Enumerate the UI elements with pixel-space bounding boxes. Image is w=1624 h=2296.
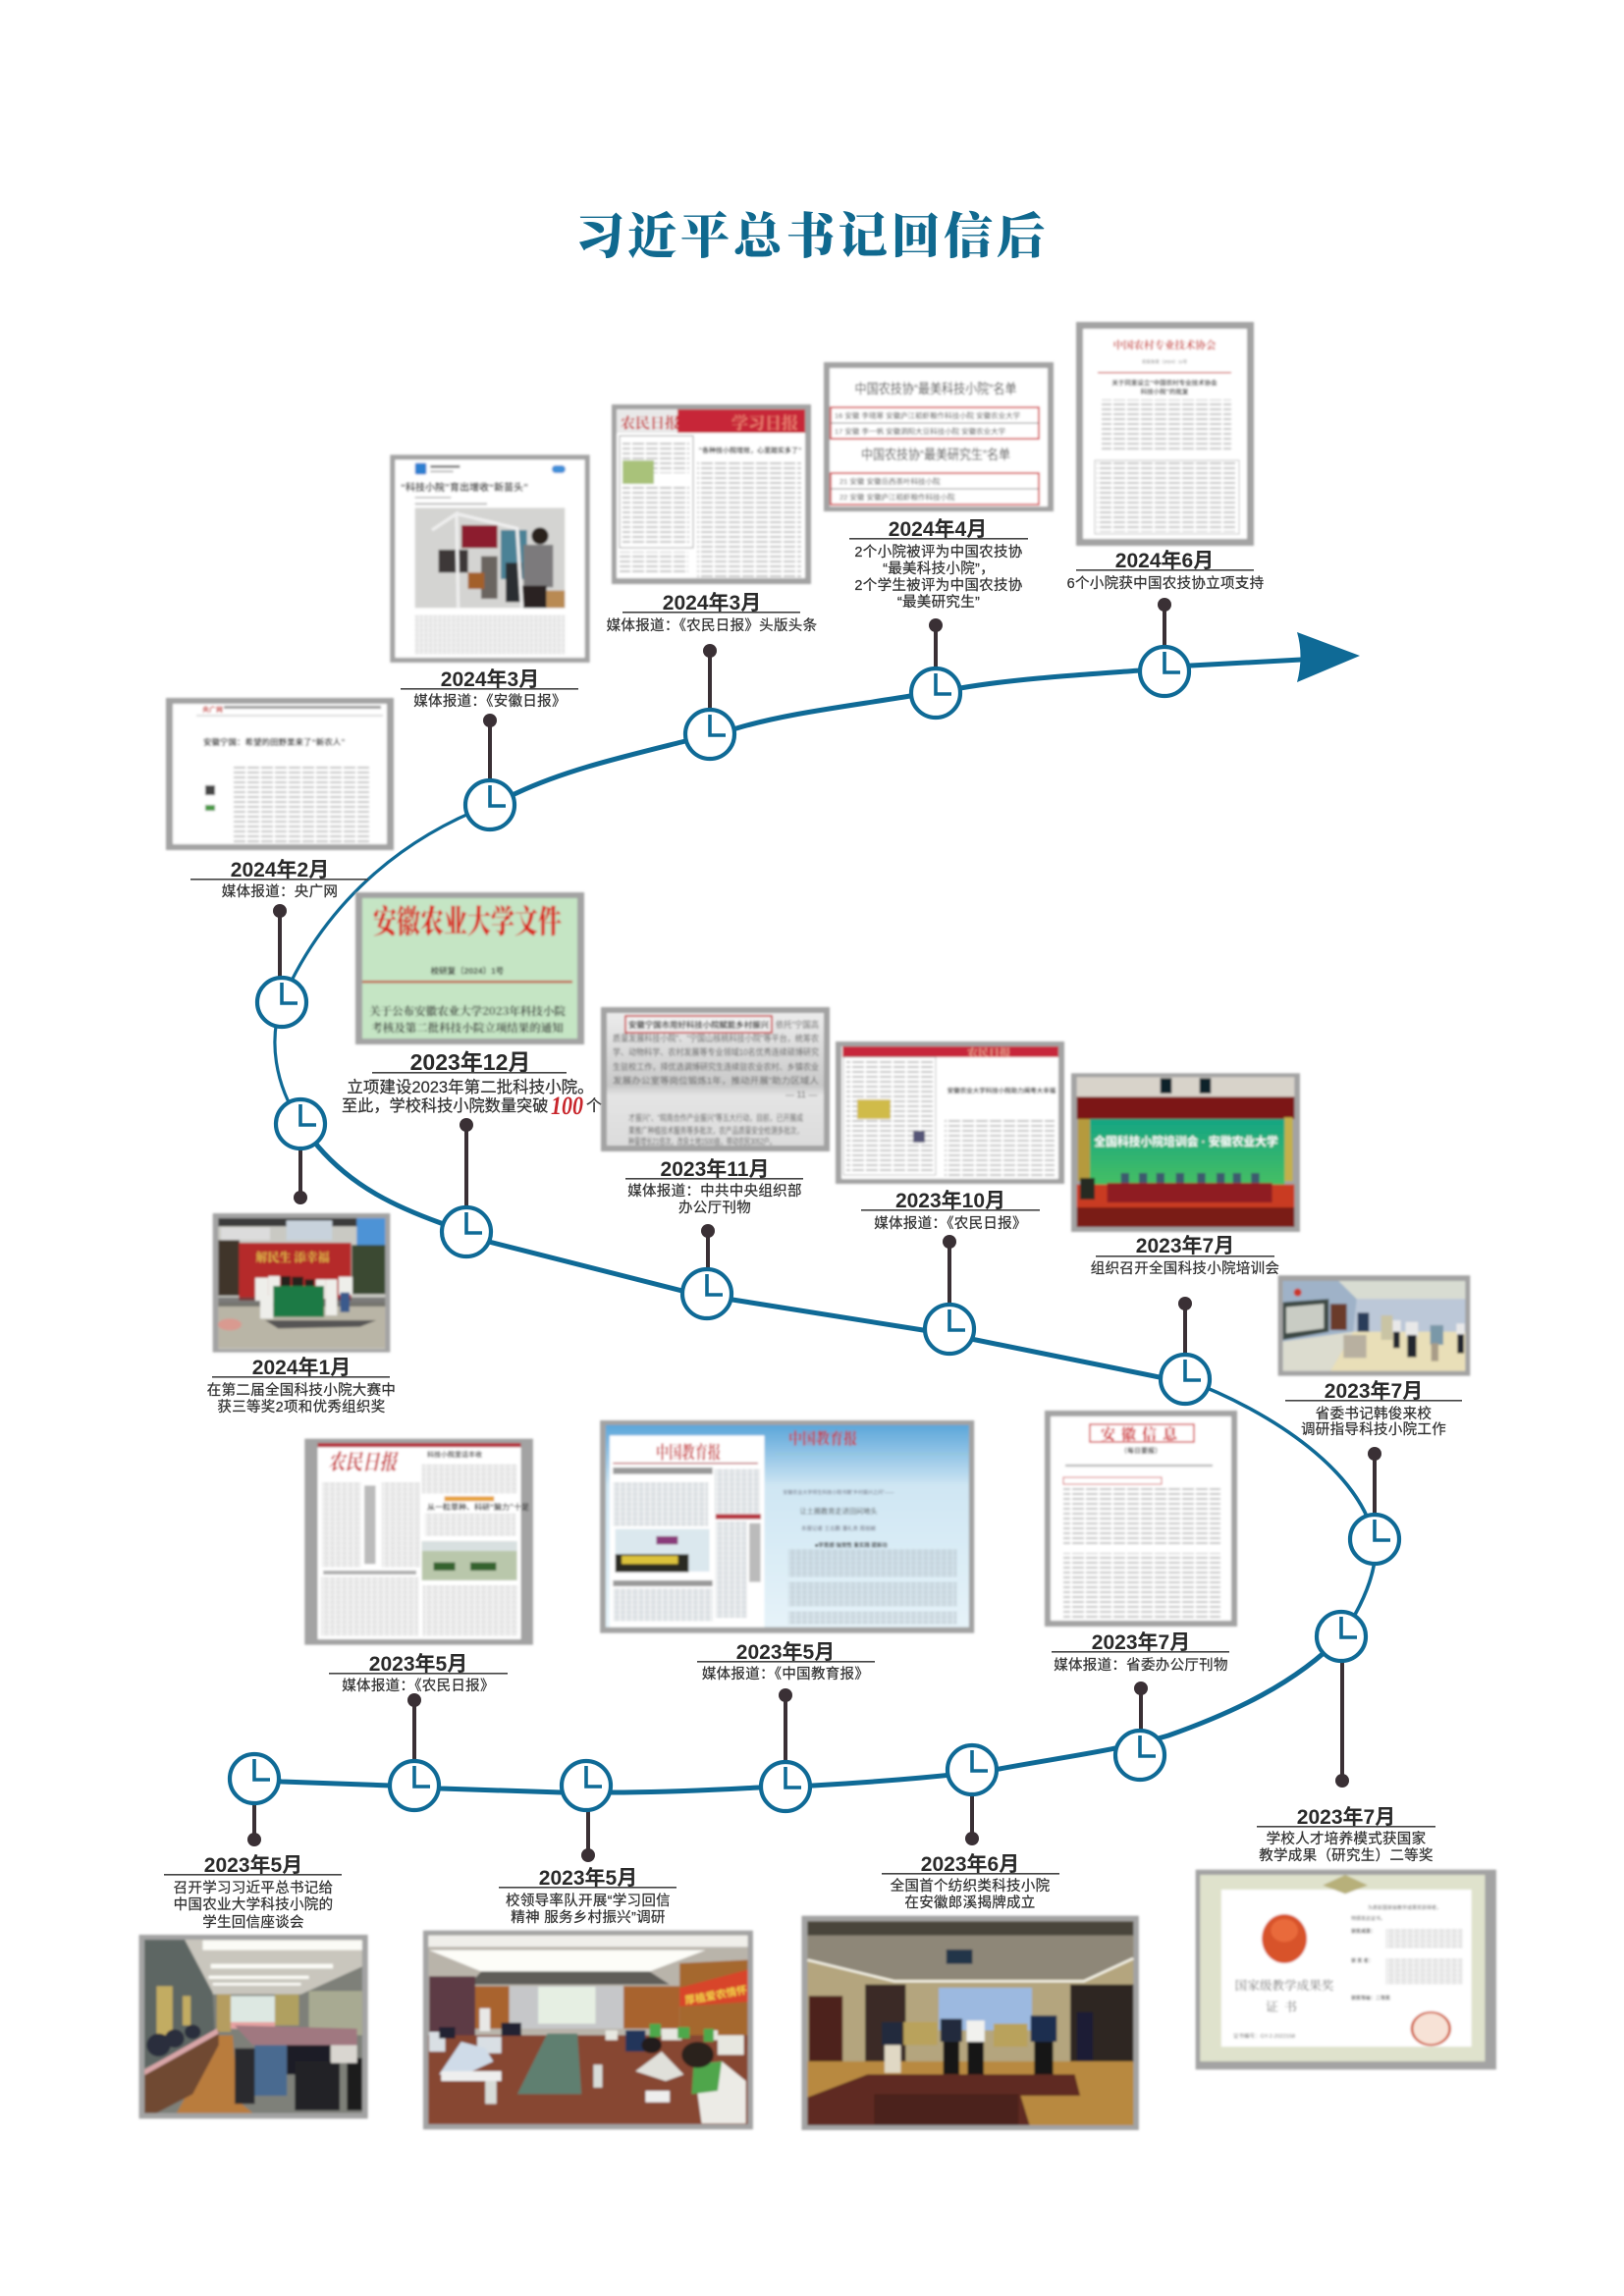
pin <box>407 1693 421 1762</box>
clock icon <box>947 1745 997 1794</box>
description: 调研指导科技小院工作 <box>1301 1421 1446 1438</box>
image: 国家级教学成果奖证书 <box>1196 1870 1496 2069</box>
milestone: 2023年5月 校领导调研 <box>423 1761 753 2129</box>
description: 媒体报道：《中国教育报》 <box>702 1666 869 1682</box>
date: 2024年3月 <box>663 592 761 614</box>
description <box>342 1078 602 1120</box>
description: 获三等奖2项和优秀组织奖 <box>217 1398 386 1415</box>
milestone: 2023年10月 <box>836 1041 1064 1354</box>
clock icon <box>761 1762 810 1811</box>
milestone: 2024年2月 <box>166 698 394 1027</box>
pin <box>247 1801 261 1846</box>
clock icon <box>442 1207 491 1256</box>
description: 校领导率队开展“学习回信 <box>506 1893 671 1909</box>
image: 农民日报头版 <box>612 404 811 584</box>
description: 媒体报道：《农民日报》 <box>342 1678 495 1694</box>
description: “最美科技小院”， <box>883 561 995 577</box>
image: 农民日报版面 <box>304 1439 533 1645</box>
milestone: 2024年3月 安徽日报 <box>390 454 590 829</box>
image: 最美科技小院名单: 中国农技协“最美研究生”名单 <box>861 447 1010 462</box>
milestone: 2023年5月 中国教育报 <box>600 1420 974 1811</box>
image: 安徽信息 <box>1045 1411 1237 1627</box>
image: 国家级教学成果奖证书: 获奖成果： <box>1351 1928 1376 1935</box>
image: 国家级教学成果奖证书: 获 奖 者： <box>1351 1957 1374 1964</box>
date: 2024年2月 <box>231 859 329 881</box>
description: 教学成果（研究生）二等奖 <box>1259 1846 1434 1864</box>
description: 媒体报道：省委办公厅刊物 <box>1054 1657 1228 1674</box>
date: 2023年11月 <box>661 1158 769 1181</box>
image: 安徽日报客户端页面 <box>390 454 590 663</box>
date: 2023年7月 <box>1325 1380 1423 1403</box>
description <box>506 1893 671 1926</box>
milestone: 2024年4月 <box>824 362 1054 718</box>
clock icon <box>682 1269 731 1318</box>
description <box>1259 1831 1434 1864</box>
description: 在第二届全国科技小院大赛中 <box>207 1381 396 1399</box>
image: 农民日报报道: 农民日报 <box>966 1045 1010 1059</box>
date: 2023年7月 <box>1092 1631 1190 1654</box>
clock icon <box>257 978 306 1027</box>
image: 培训会会场照片 <box>1071 1073 1300 1232</box>
image: 安徽农业大学文件: 关于公布安徽农业大学2023年科技小院 <box>369 1003 566 1019</box>
date: 2023年5月 <box>204 1854 302 1877</box>
clock icon <box>1140 647 1189 696</box>
title: 习近平总书记回信后 <box>575 197 1049 268</box>
image: 央广网报道: 安徽宁国：希望的田野里来了“新农人” <box>203 737 346 747</box>
description: 组织召开全国科技小院培训会 <box>1091 1259 1279 1277</box>
pin <box>1335 1661 1349 1788</box>
image: 国家级教学成果奖证书: 为表彰国家级教学成果奖获得者， <box>1368 1904 1441 1911</box>
image: 中共中央组织部办公厅刊物: 生驻校工作，择优选调博研究生连续驻农业农村、乡镇农业 <box>613 1061 819 1072</box>
image: 农民日报版面: 从一粒草种、科研“脑力”十足 <box>427 1502 529 1512</box>
date: 2023年5月 <box>369 1653 467 1676</box>
image: 中共中央组织部办公厅刊物: 质量发展科技小院”、“宁国山核桃科技小院”等平台，统筹农 <box>613 1033 819 1043</box>
image: 国家级教学成果奖证书: 获奖等级：二等奖 <box>1351 1995 1390 2002</box>
image: 大赛合影: 解民生 添幸福 <box>255 1250 330 1264</box>
pin <box>483 714 497 779</box>
image: 农民日报头版: 农民日报 <box>620 414 679 432</box>
description: 媒体报道：央广网 <box>222 883 338 900</box>
image: 央广网报道: 央广网 <box>202 705 223 714</box>
description: 媒体报道：《农民日报》 <box>874 1215 1027 1232</box>
clock icon <box>230 1754 279 1803</box>
date: 2024年6月 <box>1115 550 1214 572</box>
image: 中共中央组织部办公厅刊物: 学、动物科学、农村发展等专业领域10名优秀连续硕博研究 <box>613 1046 819 1057</box>
clock icon <box>1115 1731 1164 1780</box>
image: 国家级教学成果奖证书: 证书 <box>1266 1997 1303 2015</box>
description: 省委书记韩俊来校 <box>1316 1406 1432 1422</box>
image: 安徽信息: （每日要报） <box>1120 1446 1162 1455</box>
milestone: 2023年12月 <box>342 892 602 1256</box>
date: 2024年1月 <box>252 1357 351 1379</box>
image: 安徽农业大学文件: 安徽农业大学文件 <box>373 897 562 942</box>
image: 安徽农业大学文件: 校研复〔2024〕1号 <box>431 966 504 976</box>
image: 中共中央组织部办公厅刊物: 依托“宁国高 <box>776 1019 819 1030</box>
description: 立项建设2023年第二批科技小院。 <box>347 1078 594 1096</box>
image: 国家级教学成果奖证书: 国家级教学成果奖 <box>1235 1975 1334 1994</box>
image: 最美科技小院名单: 17 安徽 李一帆 安徽泗阳大豆科技小院 安徽农业大学 <box>835 426 1006 436</box>
image: 农民日报版面: 科技小院里话丰收 <box>427 1450 482 1459</box>
pin <box>1134 1682 1148 1732</box>
milestone: 2023年11月 <box>601 1007 830 1318</box>
pin <box>1158 598 1171 648</box>
image: 中共中央组织部办公厅刊物: 安徽宁国市用好科技小院赋能乡村振兴 <box>628 1019 769 1030</box>
milestone: 2023年6月 <box>801 1745 1139 2130</box>
image: 调研座谈照片 <box>423 1931 753 2129</box>
description: 个 <box>586 1097 602 1115</box>
image: 中国教育报版面: 安徽农业大学师生科技小院书籍“乡村振兴之问”—— <box>783 1489 894 1496</box>
description: 6个小院获中国农技协立项支持 <box>1067 575 1264 592</box>
clock icon <box>390 1761 439 1810</box>
clock icon <box>1317 1612 1366 1661</box>
image: 中国教育报版面 <box>600 1420 974 1633</box>
pin <box>581 1806 595 1862</box>
image: 中国教育报版面: 本报记者 王志鹏 潘礼贵 周丽颖 <box>801 1524 877 1532</box>
image: 调研座谈照片: 厚植爱农情怀 <box>683 1984 748 2007</box>
description: 2个小院被评为中国农技协 <box>854 544 1023 561</box>
image: 中共中央组织部办公厅刊物: 才振兴”、“皖南合作产业振兴”等五大行动，目前，已开展成 <box>628 1112 803 1123</box>
date: 2023年5月 <box>539 1867 637 1890</box>
image: 安徽信息: 安徽信息 <box>1101 1423 1183 1444</box>
description: “最美研究生” <box>897 594 980 611</box>
pin <box>273 904 287 978</box>
milestone: 2023年5月 农民日报 <box>304 1439 533 1810</box>
date: 2023年6月 <box>921 1853 1019 1876</box>
milestone: 2024年6月 <box>1067 322 1264 696</box>
description: 媒体报道：《安徽日报》 <box>413 693 567 710</box>
pin <box>460 1118 473 1207</box>
pin <box>294 1144 307 1204</box>
clock icon <box>1161 1355 1210 1404</box>
image: 国家级教学成果奖证书: 证书编号：GY-2-2022158 <box>1233 2032 1295 2040</box>
description: 办公厅刊物 <box>678 1200 751 1216</box>
pin <box>1178 1297 1192 1357</box>
image: 中共中央组织部办公厅刊物: 发展办公室等岗位锻炼1年，推动开展“助力区域人 <box>613 1075 819 1086</box>
image: 央广网报道 <box>166 698 394 850</box>
image: 农民日报头版: “各种技小院增效，心里踏实多了” <box>699 446 801 454</box>
milestone: 2023年7月 省委书记来校 <box>1278 1275 1470 1564</box>
date: 2024年3月 <box>441 668 539 691</box>
timeline curve with arrow <box>254 632 1376 1792</box>
date: 2023年10月 <box>895 1190 1005 1212</box>
image: 中共中央组织部办公厅刊物: 种量增长21倍次，改良土地1500亩，带动农民3052户。 <box>628 1136 776 1147</box>
image: 安徽农业大学文件 <box>355 892 584 1044</box>
image: 大赛合影 <box>213 1213 390 1353</box>
description <box>891 1877 1051 1911</box>
image: 国家级教学成果奖证书: 特颁发此证书。 <box>1351 1915 1385 1922</box>
image: 中共中央组织部办公厅刊物: 果推广种植技术服务等多批次，农产品质量安全检测多批次， <box>628 1125 803 1136</box>
image: 中国教育报版面: 让土圈教育走进田间地头 <box>799 1507 878 1516</box>
image: 中国教育报版面: 中国教育报 <box>788 1429 857 1448</box>
pin <box>943 1235 956 1306</box>
description: 精神 服务乡村振兴”调研 <box>511 1909 666 1926</box>
milestone: 2023年7月 教学成果奖 <box>1196 1612 1496 2069</box>
image: 安徽农业大学文件: 考核及第二批科技小院立项结果的通知 <box>371 1020 564 1036</box>
description: 至此，学校科技小院数量突破 <box>342 1097 548 1115</box>
milestone: 2023年5月 回信座谈会 <box>139 1754 368 2118</box>
description: 中国农业大学科技小院的 <box>174 1896 333 1913</box>
clock icon <box>465 780 514 829</box>
milestone: 2023年7月 省委办公厅刊物 <box>1045 1411 1237 1780</box>
image: 农民日报版面: 农民日报 <box>328 1450 399 1474</box>
description <box>1301 1406 1446 1438</box>
image: 最美科技小院名单: 21 安徽 安徽岳西茶叶科技小院 <box>839 476 941 486</box>
date: 2023年5月 <box>736 1641 835 1664</box>
description <box>174 1880 333 1931</box>
pin <box>703 644 717 711</box>
description <box>627 1183 802 1216</box>
date: 2023年7月 <box>1136 1235 1234 1257</box>
image: 最美科技小院名单: 22 安徽 安徽庐江稻虾粮作科技小院 <box>839 492 955 502</box>
image: 揭牌仪式照片 <box>801 1916 1139 2130</box>
pin <box>779 1688 792 1763</box>
clock icon <box>562 1761 611 1810</box>
clock icon <box>685 710 734 759</box>
clock icon <box>1350 1515 1399 1564</box>
description: 媒体报道：中共中央组织部 <box>627 1183 802 1200</box>
image: 农民日报报道 <box>836 1041 1064 1184</box>
image: 中国农村专业技术协会批复 <box>1076 322 1254 546</box>
description: 学校人才培养模式获国家 <box>1267 1831 1426 1847</box>
image: 中国教育报版面: ■学思想 强党性 重实践 建新功 <box>815 1541 888 1549</box>
description: 召开学习习近平总书记给 <box>174 1880 333 1896</box>
image: 培训会会场照片: 全国科技小院培训会 · 安徽农业大学 <box>1094 1135 1278 1148</box>
milestone: 2024年3月 农民日报 <box>607 404 817 759</box>
description: 100 <box>551 1092 583 1120</box>
image: 最美科技小院名单 <box>824 362 1054 511</box>
image: 最美科技小院名单: 中国农技协“最美科技小院”名单 <box>854 381 1017 397</box>
milestone: 2023年7月 培训会 <box>1071 1073 1300 1404</box>
image: 中国教育报版面: 中国教育报 <box>656 1442 721 1463</box>
date: 2023年7月 <box>1297 1806 1395 1829</box>
clock icon <box>911 668 960 718</box>
image: 中国农村专业技术协会批复: 关于同意设立“中国农村专业技术协会 <box>1111 378 1218 387</box>
date: 2024年4月 <box>889 518 987 541</box>
image: 座谈会照片 <box>139 1935 368 2118</box>
image: 中共中央组织部办公厅刊物: — 11 — <box>785 1090 817 1099</box>
image: 中国农村专业技术协会批复: 中国农村专业技术协会 <box>1113 339 1217 351</box>
clock icon <box>276 1099 325 1148</box>
pin <box>929 618 943 669</box>
image: 安徽日报客户端页面: “科技小院”育出增收“新苗头” <box>401 481 528 494</box>
pin <box>965 1791 979 1845</box>
pin <box>701 1224 715 1270</box>
image: 中国农村专业技术协会批复: 农技协发〔2024〕11号 <box>1142 358 1188 365</box>
image: 农民日报报道: 安徽农业大学科技小院助力闽粤大幸福 <box>947 1086 1056 1095</box>
description <box>207 1381 396 1415</box>
date: 2023年12月 <box>410 1049 530 1075</box>
clock icon <box>925 1305 974 1354</box>
description: 全国首个纺织类科技小院 <box>891 1877 1051 1895</box>
image: 最美科技小院名单: 16 安徽 李晓寒 安徽庐江稻虾粮作科技小院 安徽农业大学 <box>835 410 1021 420</box>
milestone: 2024年1月 <box>207 1099 396 1415</box>
description: 2个学生被评为中国农技协 <box>854 577 1023 594</box>
description: 媒体报道：《农民日报》头版头条 <box>607 617 817 634</box>
description: 学生回信座谈会 <box>202 1914 304 1931</box>
image: 书记调研照片 <box>1278 1275 1470 1376</box>
description: 在安徽郎溪揭牌成立 <box>904 1895 1036 1911</box>
image: 农民日报头版: 学习日报 <box>731 413 798 433</box>
image: 中国农村专业技术协会批复: 科技小院”的批复 <box>1141 387 1189 396</box>
image: 中共中央组织部办公厅刊物 <box>601 1007 830 1151</box>
description <box>854 544 1023 611</box>
pin <box>1368 1447 1381 1517</box>
